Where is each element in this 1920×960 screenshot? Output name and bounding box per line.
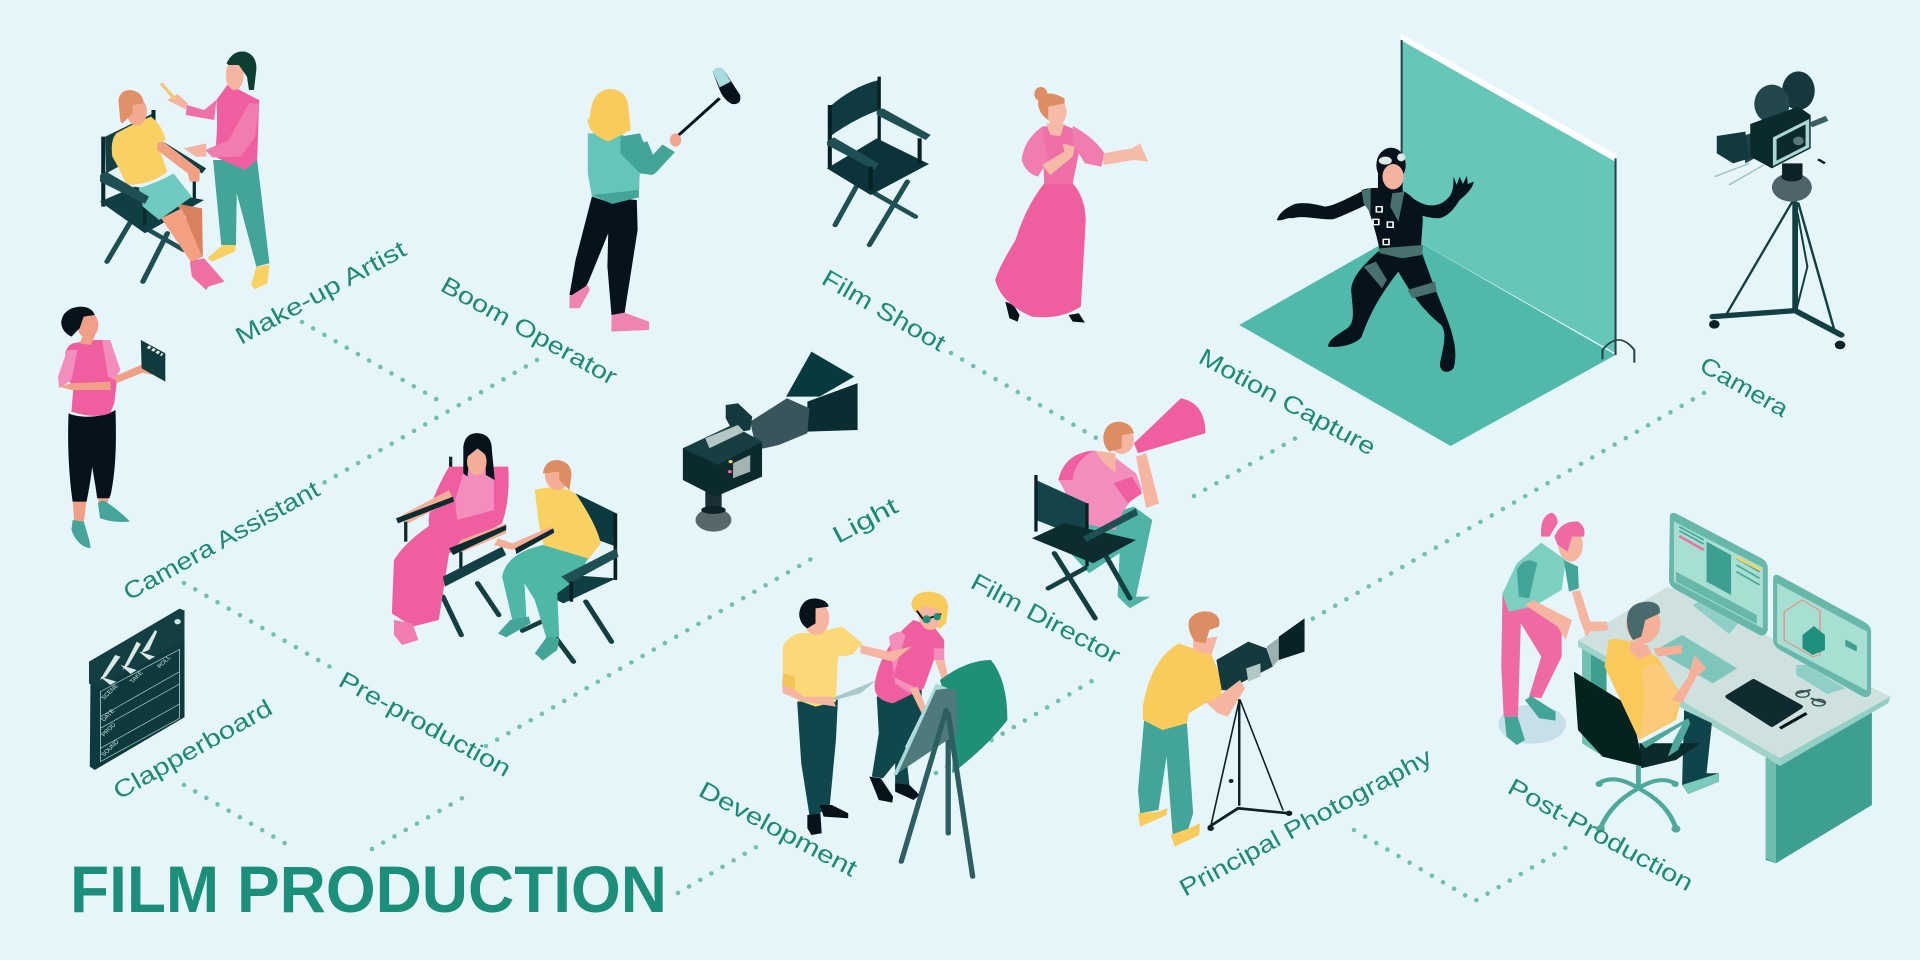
title: FILM PRODUCTION (70, 852, 667, 926)
illustration: seated couple in chairs (392, 433, 618, 662)
illustration: make-up artist and seated actor (100, 51, 269, 290)
label: Camera: Camera (1695, 352, 1793, 423)
illustration: empty director chair (827, 77, 931, 245)
illustration: camera assistant with clapper (58, 307, 165, 548)
illustration: development team with easel (782, 592, 1007, 877)
label: Make-up Artist: Make-up Artist (231, 236, 411, 350)
label: Light: Light (828, 492, 903, 549)
office chair base (1598, 767, 1676, 828)
label: Camera Assistant: Camera Assistant (119, 476, 325, 606)
label: Development: Development (694, 776, 862, 883)
label: Film Shoot: Film Shoot (817, 265, 950, 357)
clapperboard field captions: DATE (101, 709, 117, 723)
illustration: vintage film camera on tripod (1709, 71, 1845, 349)
label: Boom Operator: Boom Operator (436, 272, 621, 391)
label: Clapperboard: Clapperboard (109, 695, 277, 805)
label: Motion Capture: Motion Capture (1194, 344, 1380, 461)
illustration: clapperboard (89, 609, 185, 770)
label: Pre-production: Pre-production (334, 667, 515, 783)
clapperboard field captions: TAKE (129, 671, 145, 684)
clapperboard field captions: PROD (101, 722, 118, 738)
clapperboard field captions: SCENE (101, 684, 120, 701)
first monitor (1669, 513, 1768, 636)
clapperboard field captions: SOUND (101, 739, 121, 758)
label: Principal Photography: Principal Photography (1175, 744, 1437, 902)
illustration: film light (683, 352, 858, 532)
seated editor (1574, 602, 1719, 794)
illustration: director with megaphone (1032, 398, 1205, 618)
standing colleague (1501, 513, 1609, 745)
illustration: actress in pink dress (995, 87, 1148, 323)
label: Post-Production: Post-Production (1503, 774, 1698, 897)
illustration: motion capture green screen and actor (1239, 33, 1634, 446)
illustration: cameraman on tripod (1138, 611, 1305, 847)
illustration: post-production desk (1498, 513, 1890, 863)
label: Film Director: Film Director (966, 568, 1125, 670)
clapperboard field captions (101, 655, 173, 758)
second monitor (1773, 575, 1871, 697)
illustration: boom operator (569, 68, 740, 332)
dotted connector lines (184, 322, 1704, 901)
clapperboard field captions: ROLL (157, 655, 173, 669)
